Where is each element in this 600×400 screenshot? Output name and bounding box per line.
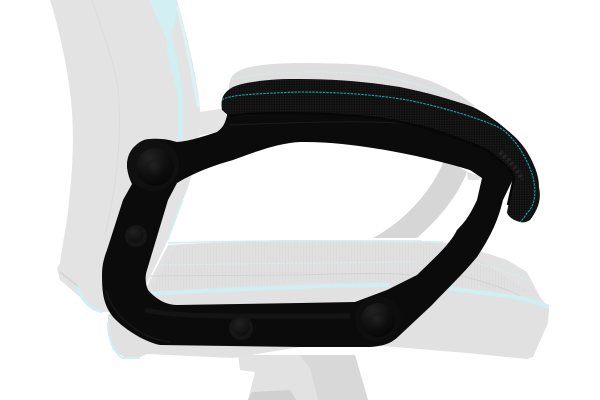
upper pivot hub [127, 139, 179, 191]
faded backrest [50, 0, 200, 312]
black arm frame [102, 95, 515, 347]
rivet: frame bottom [229, 316, 253, 340]
faded chair base [238, 355, 368, 400]
faded seat cushion [108, 240, 549, 359]
rivet: frame left [125, 225, 147, 247]
teal stitching [222, 92, 535, 222]
faded rear armrest [198, 63, 484, 238]
upper arm pad [221, 79, 540, 222]
lower pivot hub [355, 296, 401, 342]
